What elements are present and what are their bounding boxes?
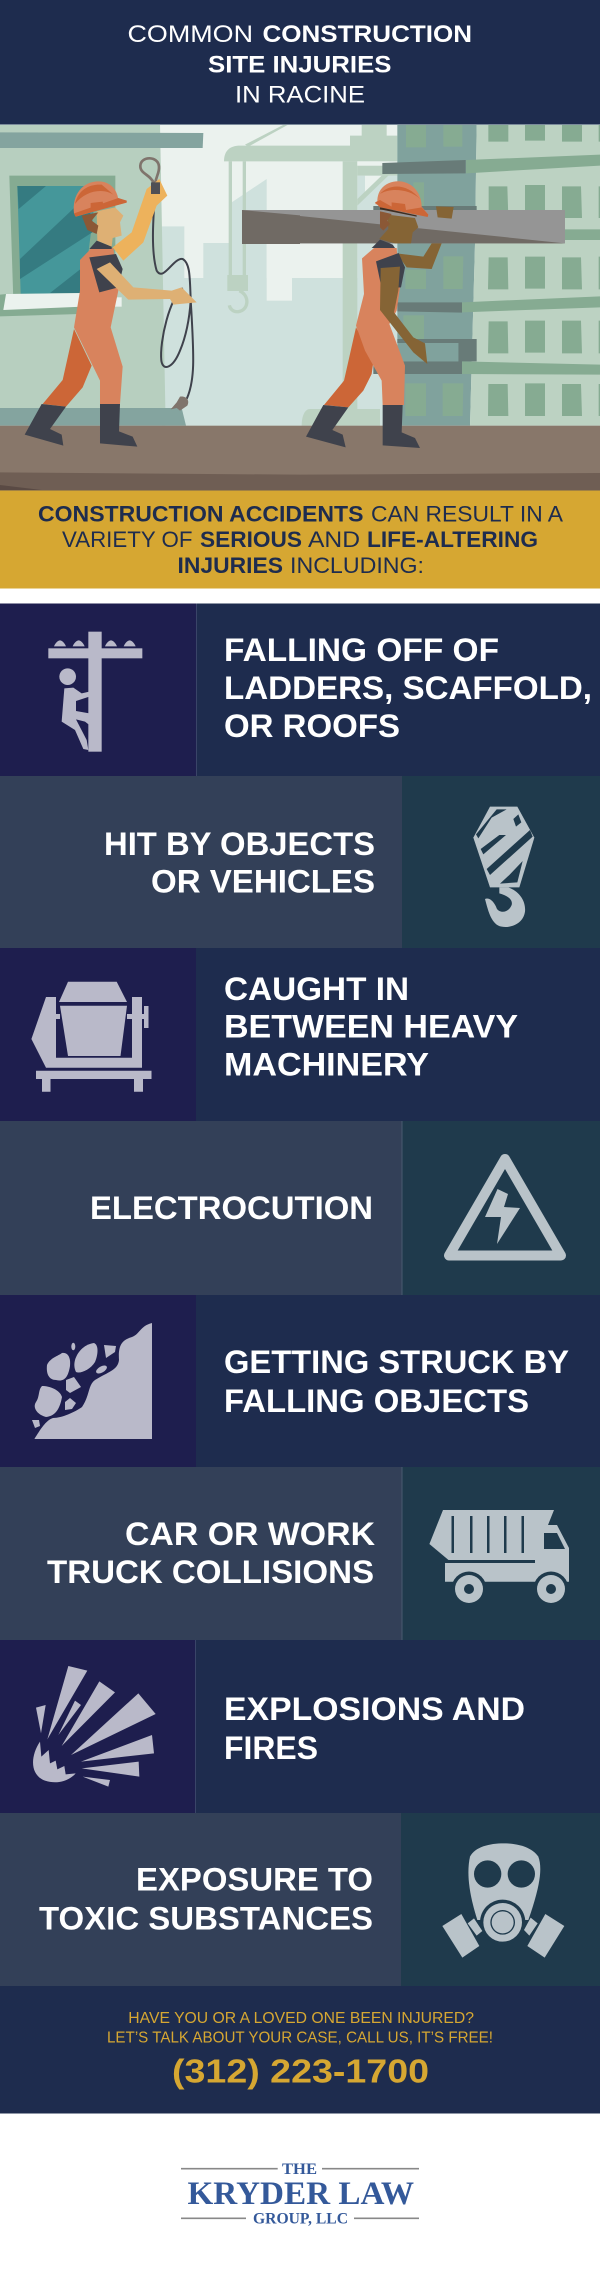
title panel: CONSTRUCTION [262, 21, 472, 48]
intro banner: INCLUDING: [290, 553, 424, 578]
icon: rockslide [32, 1323, 152, 1439]
teal tower [397, 124, 477, 426]
row 5: struck by falling objects [0, 1295, 600, 1467]
logo: The Kryder Law Group: KRYDER LAW [188, 2176, 414, 2212]
row 5: struck by falling objects: FALLING OBJECTS [224, 1383, 529, 1419]
intro banner: LIFE-ALTERING [367, 527, 538, 552]
row 5: struck by falling objects: GETTING STRUCK BY [224, 1344, 569, 1380]
row 3: caught in machinery [0, 948, 600, 1121]
ground [300, 426, 600, 491]
row 3: caught in machinery: MACHINERY [224, 1047, 429, 1083]
call to action [0, 1986, 600, 2114]
call to action: HAVE YOU OR A LOVED ONE BEEN INJURED? [128, 2010, 474, 2027]
row 8: toxic substances [0, 1813, 600, 1986]
cord [153, 192, 193, 399]
intro banner: INJURIES [178, 553, 283, 578]
row 4: electrocution [0, 1121, 600, 1295]
row 7: explosions: FIRES [224, 1730, 318, 1766]
beam [300, 210, 565, 243]
row 2: hit by objects [0, 776, 600, 948]
dark slabs [373, 160, 477, 374]
logo: The Kryder Law Group: THE [282, 2161, 317, 2178]
row 3: caught in machinery: CAUGHT IN [224, 971, 409, 1007]
worker 2 [397, 243, 442, 269]
icon: dump truck [429, 1510, 569, 1606]
row 8: toxic substances: EXPOSURE TO [136, 1861, 373, 1897]
logo: The Kryder Law Group [181, 2161, 419, 2228]
beam end [242, 210, 300, 244]
call to action: (312) 223-1700 [172, 2053, 429, 2090]
row 2: hit by objects: HIT BY OBJECTS [104, 826, 375, 862]
row 1: falling: OR ROOFS [224, 708, 400, 744]
row 7: explosions: EXPLOSIONS AND [224, 1691, 525, 1727]
intro banner: CAN RESULT IN A [371, 502, 563, 526]
row 6: truck collisions: TRUCK COLLISIONS [47, 1554, 374, 1590]
icon: climber on pole [48, 632, 142, 752]
icon: gas mask [442, 1843, 564, 1958]
illustration: construction workers [0, 124, 600, 491]
left building [0, 124, 166, 426]
title panel [0, 0, 600, 124]
logo: The Kryder Law Group: GROUP, LLC [253, 2211, 348, 2228]
title panel: SITE INJURIES [208, 52, 392, 78]
ground [0, 426, 300, 491]
row 6: truck collisions [0, 1467, 600, 1640]
row 2: hit by objects: OR VEHICLES [151, 864, 375, 900]
intro banner: SERIOUS [200, 527, 302, 552]
intro banner: VARIETY OF [62, 527, 192, 552]
row 7: explosions [0, 1640, 600, 1813]
intro banner: AND [308, 527, 360, 552]
worker 1 [113, 179, 167, 261]
intro banner: CONSTRUCTION ACCIDENTS [38, 502, 363, 526]
row 4: electrocution: ELECTROCUTION [90, 1190, 373, 1226]
icon: explosion [33, 1666, 156, 1787]
call to action: LET’S TALK ABOUT YOUR CASE, CALL US, IT’S FREE! [107, 2030, 493, 2047]
distant buildings [162, 179, 300, 426]
row 1: falling: LADDERS, SCAFFOLD, [224, 670, 592, 706]
row 8: toxic substances: TOXIC SUBSTANCES [39, 1900, 373, 1936]
row 6: truck collisions: CAR OR WORK [125, 1516, 375, 1552]
row 1: falling: FALLING OFF OF [224, 632, 499, 668]
title panel: IN RACINE [235, 82, 365, 108]
icon: high voltage triangle [449, 1159, 561, 1256]
title panel: COMMON [128, 21, 253, 48]
icon: cement mixer [31, 982, 151, 1092]
right building [470, 124, 600, 426]
crane structure [300, 278, 397, 426]
row 3: caught in machinery: BETWEEN HEAVY [224, 1009, 518, 1045]
icon: crane hook [473, 807, 534, 927]
crane [224, 124, 300, 291]
row 1: falling [0, 604, 600, 776]
intro banner [0, 490, 600, 588]
